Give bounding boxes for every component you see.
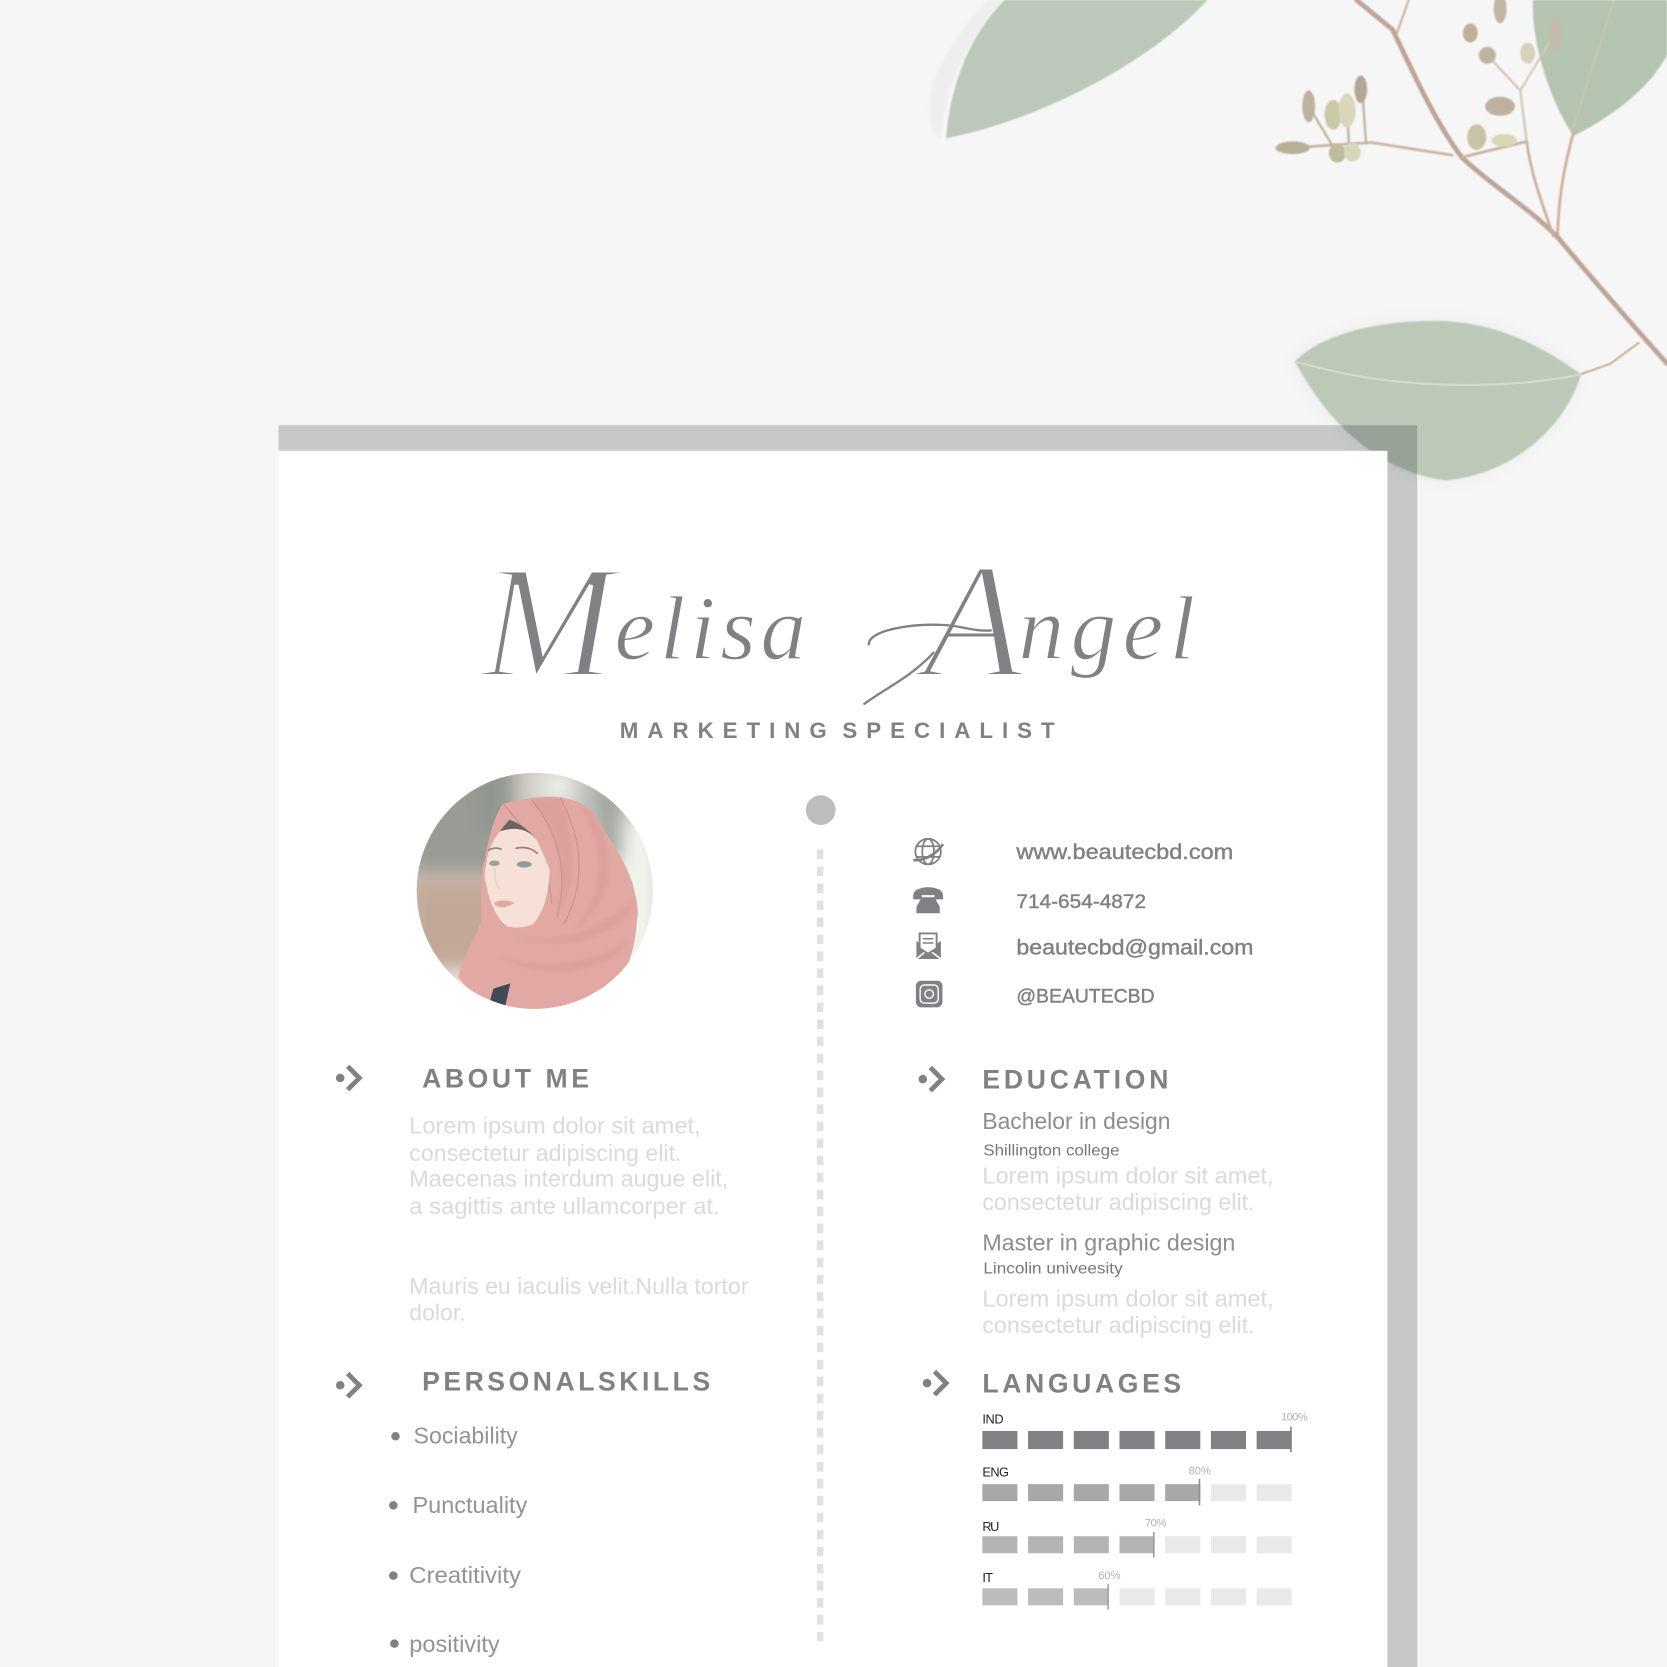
arrow icon: [336, 1374, 359, 1397]
heading: LANGUAGES: [982, 1369, 1181, 1399]
skills list: [389, 1423, 528, 1657]
profile photo: [416, 773, 653, 1009]
name text: elisa: [614, 578, 839, 679]
flower buds: [1276, 0, 1562, 163]
education entry: master: Lorem ipsum dolor sit amet,: [982, 1286, 1274, 1312]
body text: consectetur adipiscing elit.: [409, 1140, 681, 1166]
card frame: [279, 425, 1417, 1667]
title: name: [479, 529, 1201, 712]
skills list: Punctuality: [412, 1492, 528, 1518]
leaf: lower: [1292, 319, 1639, 483]
language bar: IT 60%: 60%: [1098, 1570, 1121, 1582]
heading: ABOUT ME: [422, 1064, 589, 1094]
leaf: top left: [929, 0, 1208, 140]
education entry: master: [982, 1229, 1274, 1338]
language bar: IND 100%: IND: [982, 1412, 1004, 1427]
language bar: RU 70%: [982, 1518, 1292, 1557]
language bar: ENG 80%: 80%: [1189, 1466, 1211, 1478]
education entry: master: Lincolin univeesity: [983, 1261, 1123, 1278]
white resume card: [279, 451, 1387, 1667]
icon: envelope: [916, 933, 941, 959]
heading: PERSONALSKILLS: [422, 1367, 710, 1397]
language bar: IND 100%: 100%: [1281, 1411, 1308, 1423]
section: about me: [336, 1064, 749, 1325]
skills list: Sociability: [414, 1423, 518, 1449]
icon: telephone: [913, 887, 943, 913]
education entry: bachelor: Lorem ipsum dolor sit amet,: [982, 1162, 1274, 1188]
branch stems: [1277, 0, 1667, 364]
education entry: bachelor: [982, 1108, 1274, 1215]
arrow icon: [919, 1067, 942, 1091]
language bar: IND 100%: [982, 1411, 1308, 1452]
body text: dolor.: [409, 1299, 466, 1325]
language bar: RU 70%: RU: [982, 1519, 999, 1534]
contact: phone: 714-654-4872: [1016, 891, 1146, 913]
body text: Lorem ipsum dolor sit amet,: [409, 1112, 701, 1138]
language bar: ENG 80%: [982, 1465, 1292, 1505]
body text: a sagittis ante ullamcorper at.: [409, 1193, 720, 1219]
name text: ngel: [1018, 578, 1201, 679]
skills list: Creatitivity: [409, 1562, 521, 1588]
icon: globe: [913, 839, 943, 864]
subtitle: MARKETING SPECIALIST: [620, 718, 1055, 743]
arrow icon: [923, 1371, 946, 1395]
name text: M: [479, 532, 624, 711]
education entry: master: consectetur adipiscing elit.: [982, 1312, 1255, 1338]
contact: website: www.beautecbd.com: [1015, 840, 1233, 864]
education entry: bachelor: consectetur adipiscing elit.: [982, 1189, 1255, 1215]
contact: instagram handle: @BEAUTECBD: [1016, 987, 1155, 1008]
contact list: [913, 839, 1253, 1008]
skills list: positivity: [409, 1631, 500, 1657]
education entry: master: Master in graphic design: [982, 1229, 1235, 1255]
icon: instagram: [916, 981, 942, 1007]
language bar: RU 70%: 70%: [1145, 1518, 1166, 1530]
language bar: IT 60%: IT: [982, 1570, 993, 1585]
education entry: bachelor: Bachelor in design: [982, 1108, 1171, 1134]
section: personal skills: [336, 1367, 710, 1657]
contact: email: beautecbd@gmail.com: [1016, 936, 1253, 960]
leaf: top right: [1533, 0, 1667, 236]
language bar: ENG 80%: ENG: [982, 1465, 1009, 1480]
eucalyptus branch decoration: [929, 0, 1667, 483]
body text: Mauris eu iaculis velit.Nulla tortor: [409, 1273, 749, 1299]
name flourish: [864, 625, 991, 704]
section: languages: [923, 1369, 1308, 1610]
section: education: [919, 1065, 1274, 1338]
body text: Maecenas interdum augue elit,: [409, 1165, 728, 1191]
name text: A: [913, 529, 1025, 712]
heading: EDUCATION: [982, 1065, 1168, 1095]
language bar: IT 60%: [982, 1570, 1292, 1610]
body text: [409, 1112, 749, 1325]
timeline divider: [806, 795, 836, 1644]
education entry: bachelor: Shillington college: [983, 1143, 1120, 1160]
arrow icon: [336, 1066, 359, 1090]
